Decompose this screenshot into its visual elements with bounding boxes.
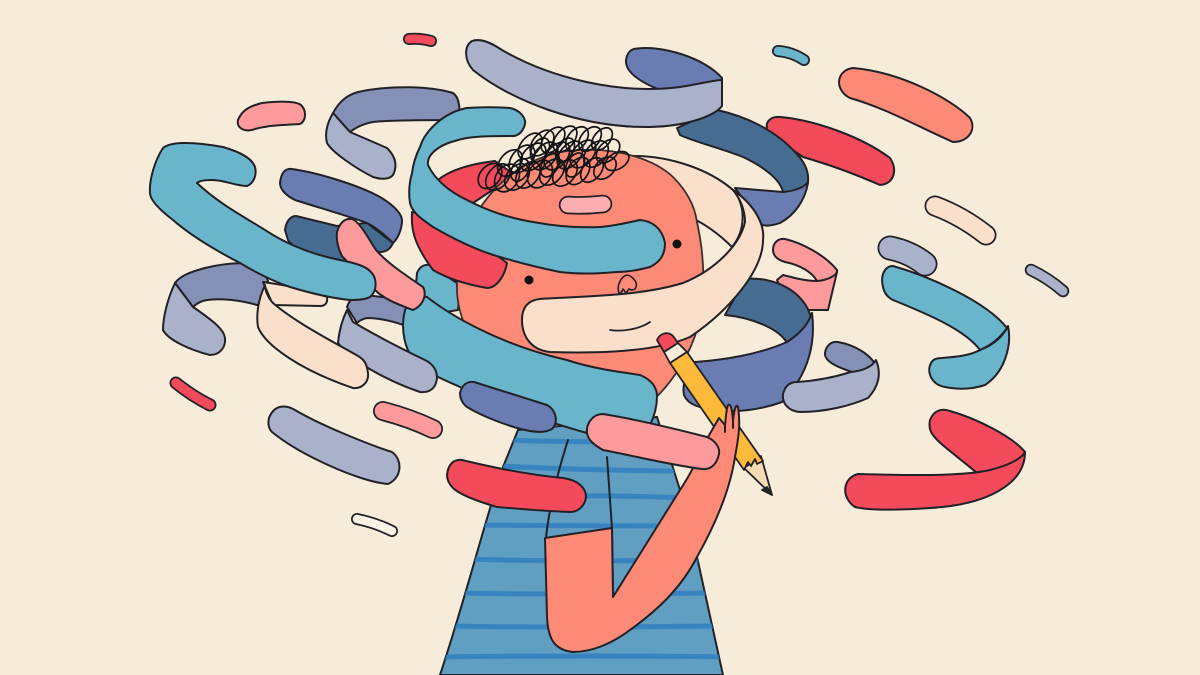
cream ribbon back behind head: [630, 156, 743, 247]
shirt: [440, 417, 730, 675]
nose: [618, 275, 636, 293]
cream ribbon left: back: [263, 282, 327, 306]
indigo pill: [460, 382, 556, 432]
pink pill over shoulder: [587, 414, 719, 469]
mid lavender ribbon: dark back: [347, 295, 408, 325]
red band behind head: [438, 161, 515, 205]
pink pill lower left: [383, 411, 433, 429]
cream pill right: [935, 206, 986, 235]
arm and hand: [545, 405, 739, 652]
indigo ribbon right of head: [683, 313, 813, 411]
large salmon pill top right: [839, 68, 972, 142]
pencil: [657, 333, 772, 495]
forehead pink pill: [568, 204, 603, 205]
dark band behind left: [285, 216, 393, 275]
pink pill top left: [238, 102, 305, 130]
outlined empty pill: [357, 519, 392, 531]
dark blue ribbon upper right: indigo fold: [735, 177, 808, 226]
mid lavender ribbon: light front: [338, 310, 437, 392]
left lavender ribbon: dark top: [175, 263, 275, 307]
dark blue ribbon right of head: [725, 279, 811, 343]
red ribbon lower right: [845, 410, 1025, 510]
red pill over shirt: [447, 460, 586, 512]
top lavender ribbon front: [466, 40, 722, 127]
right eye: [672, 240, 682, 248]
indigo ribbon left: [280, 169, 402, 243]
red band lower in front of head: [412, 212, 507, 288]
illustration: person surrounded by swirling ribbons: [148, 32, 1070, 675]
big teal ribbon upper left: [150, 143, 376, 300]
small teal pill top right: [778, 51, 804, 60]
dark blue ribbon upper right: [677, 110, 808, 192]
large lavender pill lower left: [268, 406, 399, 484]
top lavender ribbon back fold: [626, 48, 722, 100]
cream ribbon left: front: [257, 285, 368, 388]
lavender ribbon upper left: light: [326, 113, 395, 179]
lavender pill right: [890, 248, 925, 264]
left eye: [524, 276, 534, 284]
lavender ribbon upper left: dark top: [333, 87, 459, 132]
mouth: [610, 322, 650, 331]
small red pill left: [176, 383, 210, 405]
head: [457, 150, 703, 410]
cream ribbon front around face: [522, 190, 763, 352]
teal ribbon right: [882, 266, 1009, 389]
red pill upper right: [767, 117, 894, 185]
big teal ribbon front: [403, 297, 657, 440]
hair scribble: [473, 122, 632, 197]
small ribbon right: dark back: [825, 342, 877, 373]
teal small back fold: [415, 265, 460, 313]
small ribbon right: light front: [783, 360, 879, 412]
pink pill over left ribbons: [337, 219, 425, 310]
teal ribbon across forehead: [409, 107, 665, 274]
small lavender pill far right: [1031, 270, 1063, 291]
pink ribbon behind head right: [773, 239, 837, 310]
left lavender ribbon: light: [163, 283, 225, 355]
small red pill top: [409, 39, 431, 41]
